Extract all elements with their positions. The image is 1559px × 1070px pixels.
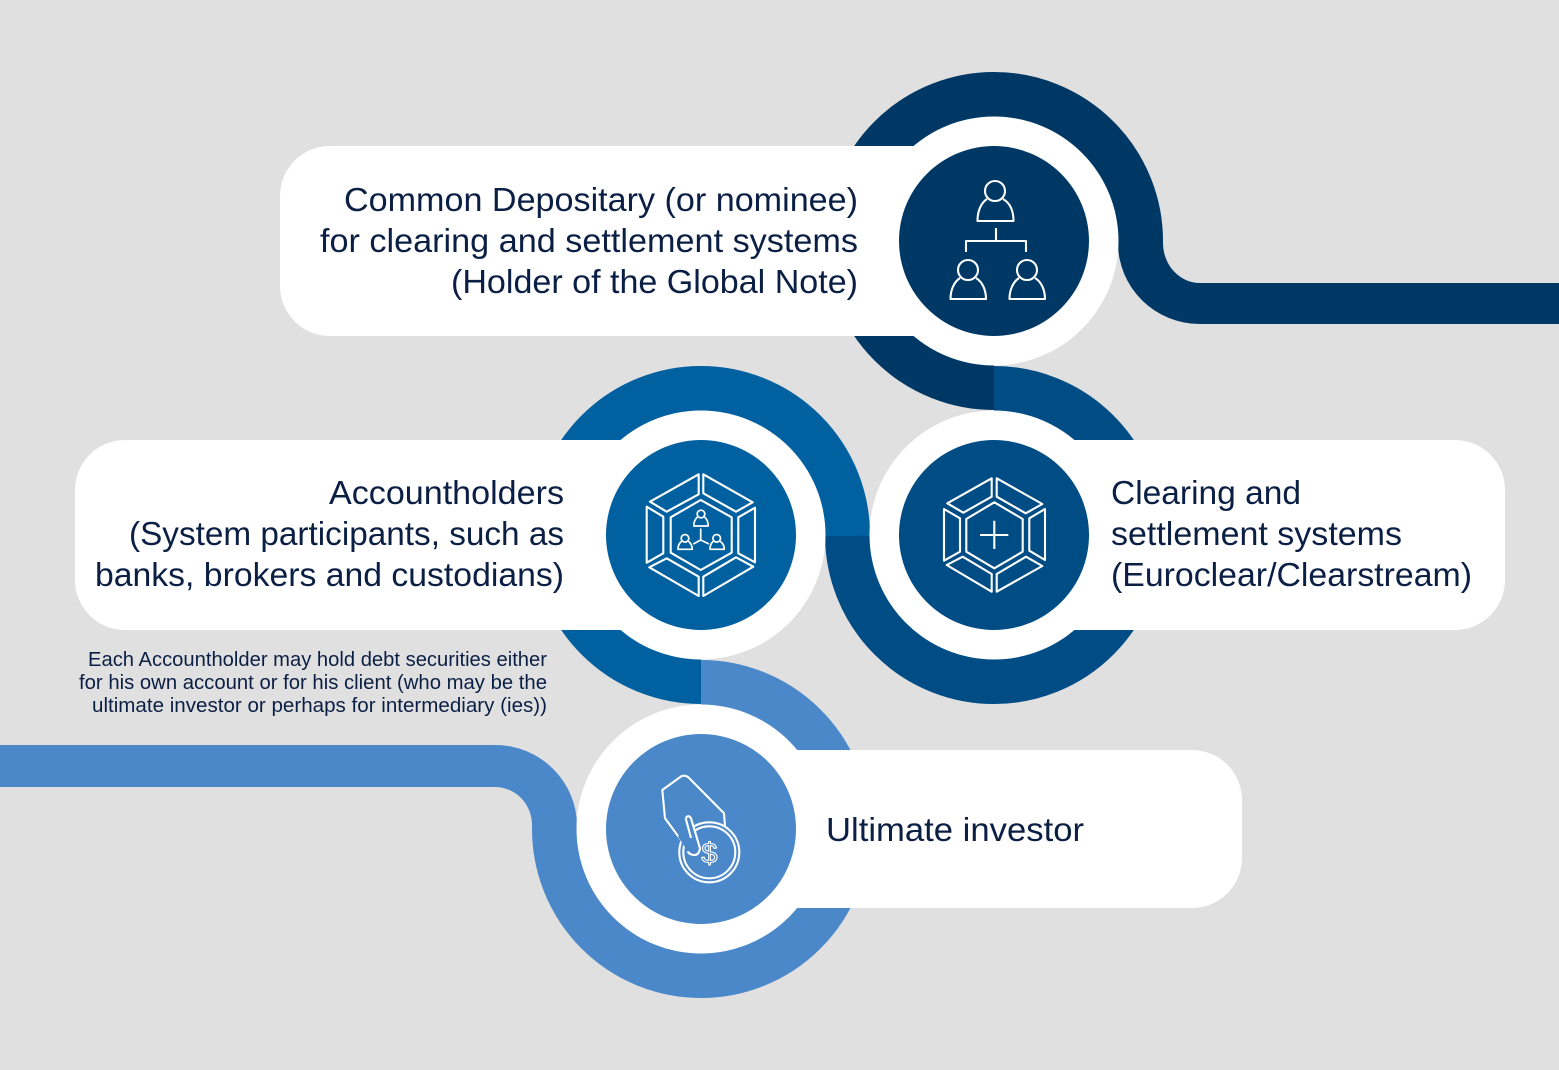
note: accountholder explanation: for his own account or for his client (who may be the [79,672,547,694]
heading: common depositary: for clearing and settlement systems [320,222,858,259]
heading: common depositary: Common Depositary (or nominee) [344,181,858,218]
icon: organisation people [950,181,1045,299]
panel: clearing and settlement systems [870,410,1505,660]
panel: ultimate investor [576,704,1242,954]
connector ring: deep blue [848,388,1140,682]
icon disc: ultimate investor [606,734,796,924]
heading: common depositary: (Holder of the Global Note) [451,263,858,300]
icon: hexagon with plus [944,478,1045,592]
connector ribbon: navy [847,94,1559,388]
icon disc: clearing systems [899,440,1089,630]
heading: accountholders: Accountholders [329,474,564,511]
heading: clearing systems [1111,474,1472,593]
note: accountholder explanation: Each Accountholder may hold debt securities either [88,649,547,671]
heading: accountholders [95,474,564,593]
heading: accountholders: (System participants, such as [129,515,564,552]
note: accountholder explanation [79,649,547,717]
heading: clearing systems: (Euroclear/Clearstream) [1111,556,1472,593]
panel: common depositary [280,116,1118,366]
connector ribbon: lightest blue [0,682,847,975]
icon disc: accountholders [606,440,796,630]
heading: ultimate investor: Ultimate investor [826,811,1084,848]
note: accountholder explanation: ultimate investor or perhaps for intermediary (ies)) [92,695,547,717]
heading: accountholders: banks, brokers and custodians) [95,556,564,593]
connector ring: mid blue [554,388,848,682]
icon disc: common depositary [899,146,1089,336]
heading: clearing systems: settlement systems [1111,515,1402,552]
heading: clearing systems: Clearing and [1111,474,1301,511]
icon: hexagon with people [647,474,755,596]
icon: hand with coin [662,776,739,882]
icon: hand with coin: $ [701,838,718,870]
heading: common depositary [320,181,858,300]
panel: accountholders [75,410,826,660]
